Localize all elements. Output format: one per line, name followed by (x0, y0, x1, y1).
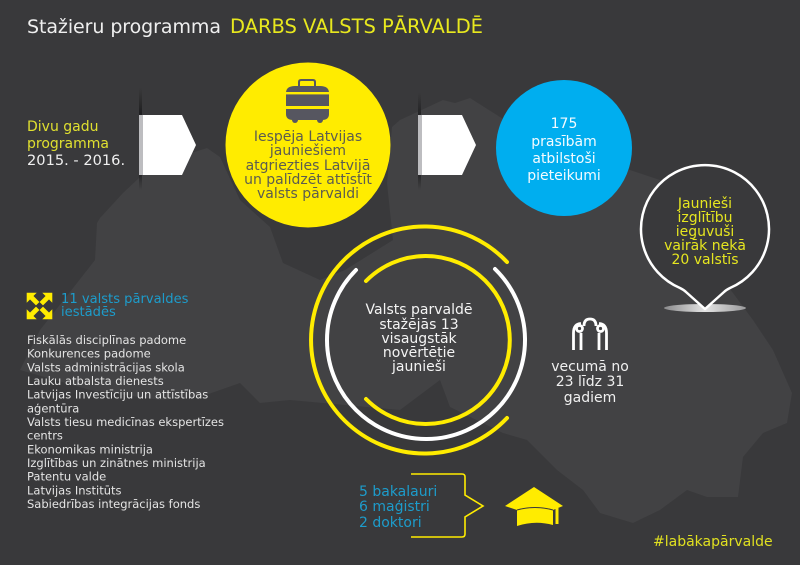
text: degrees (359, 484, 437, 531)
text: age range: gadiem (564, 390, 616, 406)
text: degrees: 5 bakalauri (359, 484, 437, 500)
heading: 11 institutions (61, 292, 189, 320)
bracket (411, 474, 483, 537)
text: 13 interns (366, 302, 472, 375)
yellow circle: opportunity (226, 62, 390, 228)
map pin callout: 20 countries (641, 165, 769, 312)
text: programme duration (27, 119, 125, 169)
list of institutions: aģentūra (27, 401, 79, 415)
list of institutions: Konkurences padome (27, 347, 151, 361)
blue circle: applications: prasībām (531, 134, 597, 150)
list of institutions: Sabiedrības integrācijas fonds (27, 497, 200, 511)
list of institutions: centrs (27, 429, 63, 443)
title: DARBS VALSTS PĀRVALDĒ (230, 14, 483, 38)
map pin callout: 20 countries: Jaunieši (677, 196, 732, 212)
list of institutions: Valsts administrācijas skola (27, 360, 185, 374)
icon: graduation cap (505, 487, 563, 526)
list of institutions: Latvijas Institūts (27, 483, 122, 497)
text: opportunity: valsts pārvaldi (257, 186, 359, 202)
list of institutions: Latvijas Investīciju un attīstības (27, 388, 208, 402)
icon: people (574, 319, 606, 350)
heading: 11 institutions: iestādēs (61, 305, 116, 320)
text: degrees: 6 maģistri (359, 499, 430, 515)
concentric rings (311, 226, 525, 454)
map pin callout: 20 countries: izglītību (677, 210, 733, 226)
blue circle: applications: atbilstoši (532, 151, 596, 167)
icon: suitcase (285, 80, 330, 123)
text: opportunity: jauniešiem (269, 143, 346, 159)
text: programme duration: programma (27, 136, 109, 152)
text: age range: 23 līdz 31 (556, 374, 624, 390)
map pin callout: 20 countries: ieguvuši (676, 224, 734, 240)
list of institutions: Lauku atbalsta dienests (27, 374, 164, 388)
text: 13 interns: novērtētie (383, 345, 455, 361)
text: 13 interns: jaunieši (391, 359, 446, 375)
text: 13 interns: stažējās 13 (379, 317, 459, 333)
blue circle: applications (496, 80, 632, 216)
heading: 11 institutions: 11 valsts pārvaldes (61, 292, 189, 307)
icon: expand arrows (27, 293, 52, 319)
text: opportunity (244, 129, 372, 202)
arrow 1 (139, 88, 196, 190)
title: Stažieru programma (27, 16, 221, 38)
title (27, 14, 483, 38)
list of institutions (27, 333, 224, 511)
text: programme duration: Divu gadu (27, 119, 99, 135)
list of institutions: Izglītības un zinātnes ministrija (27, 456, 206, 470)
text: 13 interns: Valsts parvaldē (366, 302, 472, 318)
blue circle: applications: pieteikumi (527, 168, 601, 184)
map pin callout: 20 countries: 20 valstīs (672, 252, 738, 268)
list of institutions: Patentu valde (27, 470, 106, 484)
text: programme duration: 2015. - 2016. (27, 152, 125, 169)
map of Latvia (20, 98, 792, 523)
arrow 2 (418, 93, 476, 190)
text: age range: vecumā no (551, 359, 629, 375)
text: opportunity: Iespēja Latvijas (254, 129, 362, 145)
blue circle: applications: 175 (551, 116, 577, 132)
text: 13 interns: visaugstāk (381, 331, 458, 347)
text: age range (551, 359, 629, 406)
map pin callout: 20 countries: vairāk nekā (664, 238, 746, 254)
text: degrees: 2 doktori (359, 515, 422, 531)
text: opportunity: atgriezties Latvijā (246, 158, 370, 174)
list of institutions: Valsts tiesu medicīnas ekspertīzes (27, 415, 224, 429)
text: opportunity: un palīdzēt attīstīt (244, 172, 372, 188)
list of institutions: Fiskālās disciplīnas padome (27, 333, 186, 347)
list of institutions: Ekonomikas ministrija (27, 442, 153, 456)
hashtag: #labākapārvalde (653, 534, 773, 550)
